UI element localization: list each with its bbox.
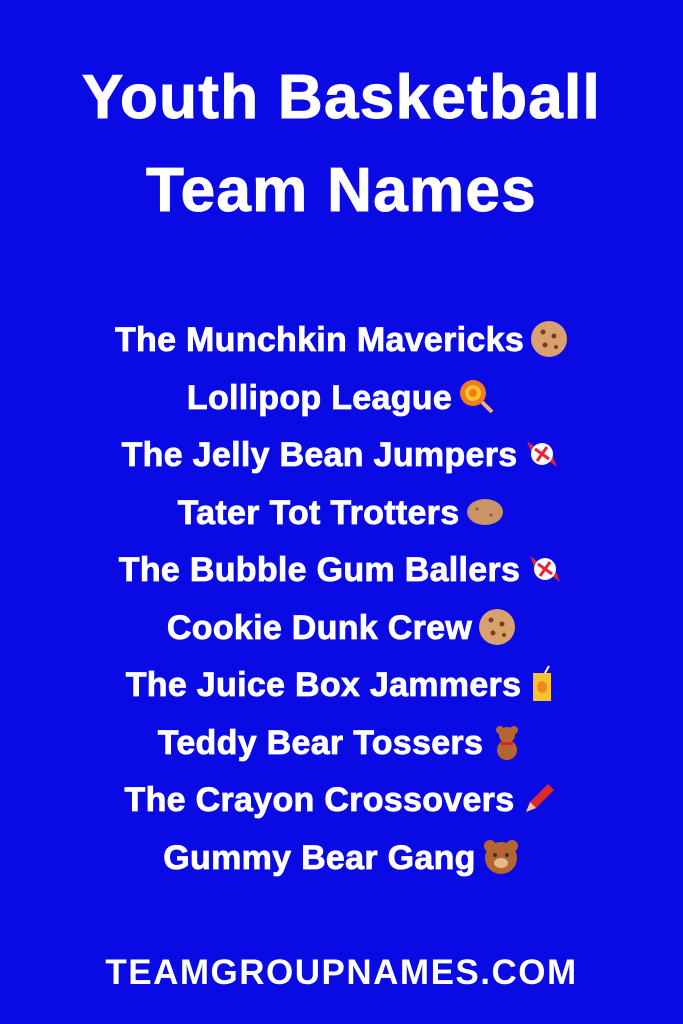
name 6: Cookie Dunk Crew [167, 608, 472, 646]
name 10: Gummy Bear Gang [163, 838, 476, 876]
name 3: The Jelly Bean Jumpers [122, 436, 517, 474]
list of team names [114, 321, 567, 876]
title: Youth Basketball [82, 63, 601, 132]
footer website: TEAMGROUPNAMES.COM [105, 953, 578, 992]
name 4: Tater Tot Trotters [178, 494, 459, 532]
name 2: Lollipop League [187, 378, 452, 416]
title [82, 63, 601, 225]
name 1: The Munchkin Mavericks [115, 321, 524, 359]
name 8: Teddy Bear Tossers [158, 724, 483, 762]
name 5: The Bubble Gum Ballers [119, 551, 520, 589]
name 9: The Crayon Crossovers [125, 781, 514, 819]
title: Team Names [146, 156, 537, 225]
name 7: The Juice Box Jammers [126, 666, 521, 704]
